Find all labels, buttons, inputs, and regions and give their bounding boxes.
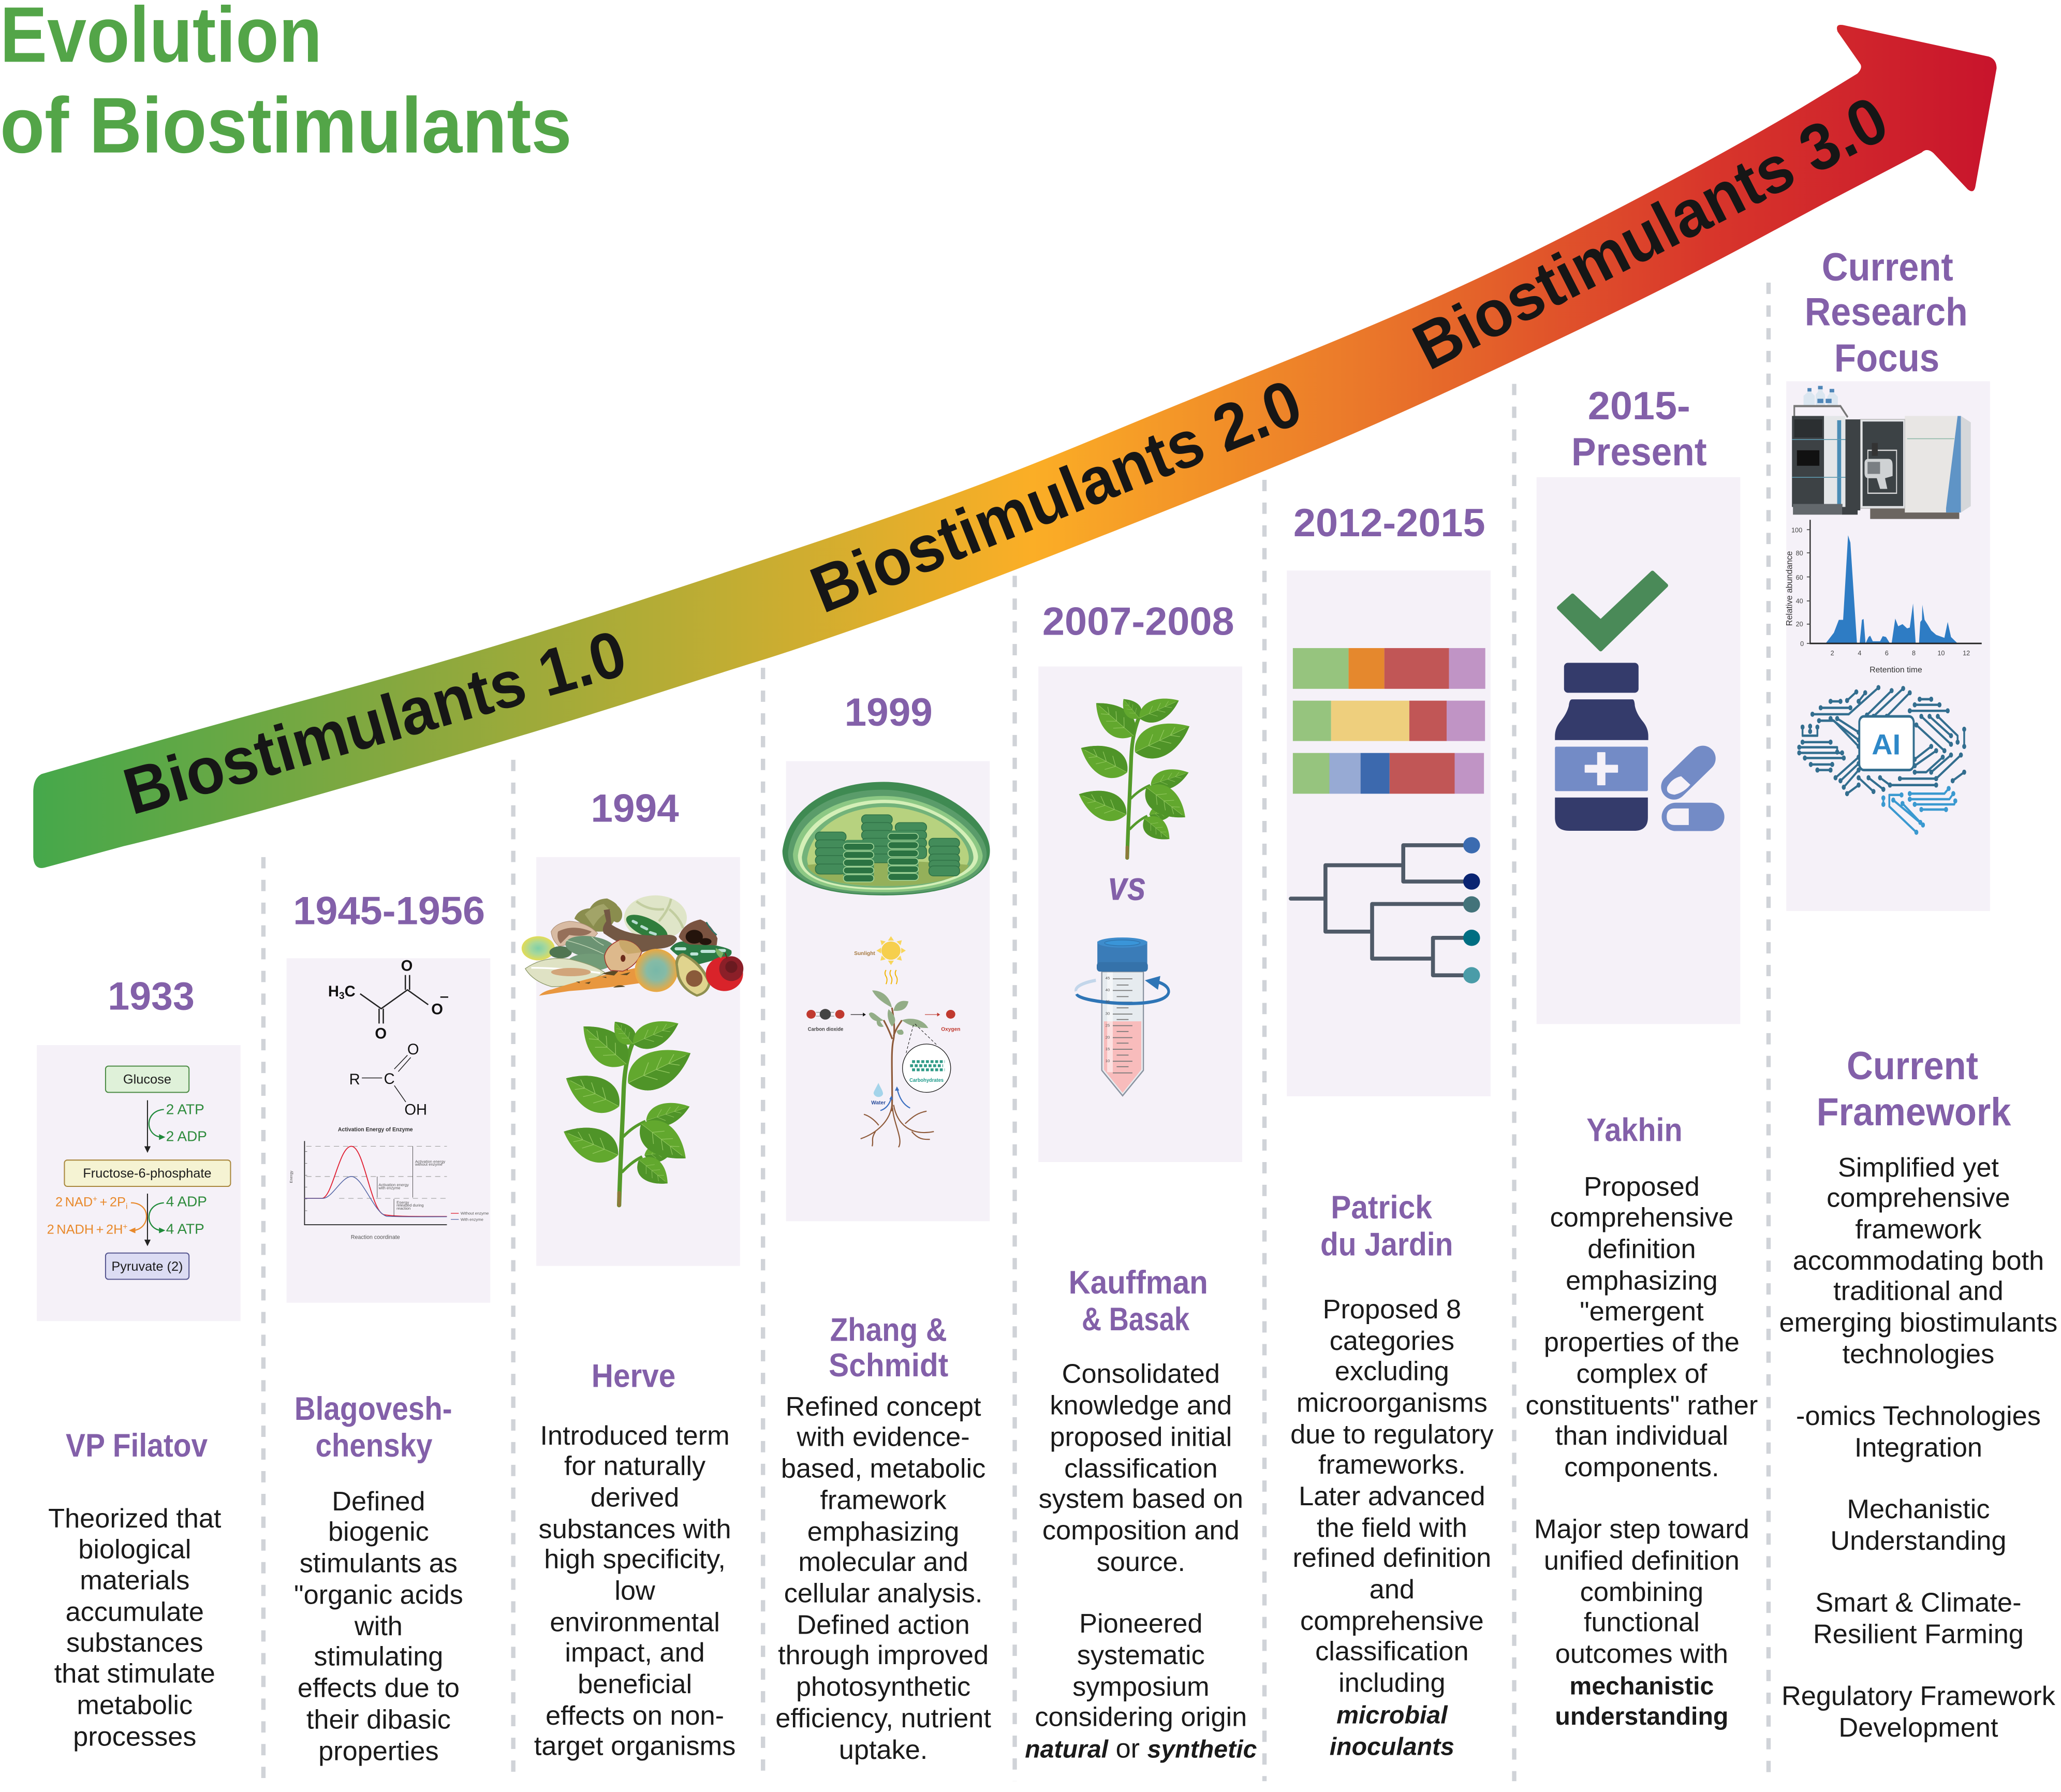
activation energy chart: without enzyme xyxy=(415,1162,443,1167)
year heading: 1945-1956 xyxy=(293,889,485,933)
description: Integration xyxy=(1854,1433,1982,1463)
description: their dibasic xyxy=(306,1705,451,1735)
description: Defined action xyxy=(797,1610,970,1640)
description: outcomes with xyxy=(1555,1639,1728,1669)
pathway arrows xyxy=(129,1100,165,1246)
tube scale numbers: 15 xyxy=(1106,1047,1110,1051)
panel: chloroplast and photosynthesis xyxy=(783,761,990,1221)
description: through improved xyxy=(778,1640,989,1670)
energy labels: + 2P xyxy=(97,1195,126,1209)
description: microbial xyxy=(1336,1701,1448,1729)
description: "organic acids xyxy=(294,1580,463,1610)
panel: composition bars and tree xyxy=(1287,570,1491,1096)
description: Introduced term xyxy=(540,1421,730,1451)
description: low xyxy=(614,1576,655,1606)
column: 1945-1956 xyxy=(287,889,490,1766)
description: source. xyxy=(1097,1547,1185,1577)
chromatogram: 0 xyxy=(1800,640,1804,648)
author name: Schmidt xyxy=(829,1347,948,1384)
description: refined definition xyxy=(1292,1543,1491,1573)
description: due to regulatory xyxy=(1290,1419,1494,1449)
author name: chensky xyxy=(315,1428,433,1464)
activation energy chart: Activation Energy of Enzyme xyxy=(338,1126,413,1133)
activation energy chart xyxy=(289,1126,489,1241)
description: beneficial xyxy=(578,1669,692,1699)
author name: Blagovesh- xyxy=(295,1391,452,1427)
author name: Patrick xyxy=(1331,1189,1432,1226)
description: cellular analysis. xyxy=(784,1579,982,1609)
title xyxy=(0,0,572,170)
carboxyl group: O xyxy=(407,1041,419,1058)
description: framework xyxy=(820,1485,947,1515)
author name xyxy=(829,1312,948,1384)
description: molecular and xyxy=(798,1547,968,1577)
Pyruvate box xyxy=(106,1253,189,1280)
tube scale numbers: 35 xyxy=(1106,1000,1110,1004)
chromatogram: 40 xyxy=(1796,598,1803,605)
tube scale numbers: 45 xyxy=(1106,976,1110,980)
description: comprehensive xyxy=(1550,1202,1733,1232)
description: high specificity, xyxy=(544,1545,726,1575)
panel: plant versus centrifuge tube xyxy=(1038,667,1242,1162)
chromatogram: 4 xyxy=(1858,650,1861,657)
description: uptake. xyxy=(839,1735,928,1765)
pyruvate molecule: H xyxy=(328,983,339,1000)
description: components. xyxy=(1564,1452,1719,1482)
arrow label: Biostimulants 2.0: Biostimulants 2.0 xyxy=(801,365,1312,627)
tube scale numbers: 30 xyxy=(1106,1011,1110,1016)
pyruvate molecule: O xyxy=(431,1001,443,1018)
photosynthesis labels: Sunlight xyxy=(854,951,875,957)
year heading: 1933 xyxy=(108,974,195,1018)
panel: approved medicine xyxy=(1537,477,1740,1024)
description: proposed initial xyxy=(1050,1422,1232,1452)
description: Defined xyxy=(332,1487,425,1517)
activation energy chart: reaction xyxy=(396,1206,410,1211)
energy labels: 2 ATP xyxy=(166,1101,204,1117)
vs label: vs xyxy=(1108,863,1146,908)
description: accommodating both xyxy=(1793,1246,2044,1276)
description: traditional and xyxy=(1833,1276,2004,1306)
description: including xyxy=(1338,1668,1446,1698)
icon: centrifuge tube xyxy=(1076,937,1169,1096)
description: classification xyxy=(1315,1636,1469,1666)
activation energy chart: Activation energy xyxy=(415,1159,445,1164)
icon: LC-MS instrument xyxy=(1792,386,1971,519)
energy labels: 4 ATP xyxy=(166,1221,204,1237)
photosynthesis labels: Oxygen xyxy=(941,1027,960,1033)
description: system based on xyxy=(1039,1484,1243,1514)
description: than individual xyxy=(1555,1421,1728,1451)
description: derived xyxy=(591,1482,679,1512)
description: technologies xyxy=(1843,1340,1994,1370)
author name xyxy=(295,1391,452,1464)
description: Theorized that xyxy=(48,1504,222,1534)
Glucose label: Glucose xyxy=(123,1072,171,1086)
description: environmental xyxy=(550,1608,720,1638)
chromatogram xyxy=(1785,520,1982,674)
carboxyl group xyxy=(349,1041,427,1119)
activation energy chart: with enzyme xyxy=(378,1185,401,1190)
arrow label: Biostimulants 1.0: Biostimulants 1.0 xyxy=(115,616,634,829)
icon: AI circuit brain: AI xyxy=(1872,728,1901,761)
activation energy chart: With enzyme xyxy=(461,1217,483,1222)
activation energy chart: Energy xyxy=(396,1200,409,1205)
author name xyxy=(1069,1265,1208,1338)
description: Later advanced xyxy=(1299,1481,1485,1511)
heading: Research xyxy=(1805,290,1968,334)
description: Simplified yet xyxy=(1838,1153,1999,1183)
pyruvate molecule xyxy=(328,958,448,1042)
description: photosynthetic xyxy=(796,1672,970,1702)
description: Proposed xyxy=(1584,1172,1700,1202)
description: comprehensive xyxy=(1300,1606,1484,1636)
description: stimulants as xyxy=(300,1548,458,1578)
description: combining xyxy=(1580,1577,1703,1607)
chromatogram: 100 xyxy=(1791,527,1802,534)
description: emphasizing xyxy=(1566,1266,1718,1296)
description: constituents" rather xyxy=(1525,1391,1758,1421)
tube scale numbers: 10 xyxy=(1106,1059,1110,1063)
photosynthesis labels: Carbon dioxide xyxy=(808,1027,844,1033)
column: Current Research Focus xyxy=(1785,245,1990,911)
description: -omics Technologies xyxy=(1796,1401,2041,1431)
description: Mechanistic xyxy=(1847,1494,1990,1524)
description: Smart & Climate- xyxy=(1815,1588,2022,1618)
carboxyl group: OH xyxy=(404,1102,427,1119)
tube scale numbers: 20 xyxy=(1106,1035,1110,1039)
description: complex of xyxy=(1576,1359,1707,1389)
description: frameworks. xyxy=(1318,1450,1466,1480)
chromatogram: 10 xyxy=(1937,650,1945,657)
tube scale numbers xyxy=(1106,976,1110,1063)
year heading: 1999 xyxy=(845,691,933,735)
year heading: Present xyxy=(1571,430,1707,474)
author name: du Jardin xyxy=(1320,1226,1453,1262)
description: for naturally xyxy=(564,1451,706,1481)
description: Pioneered xyxy=(1079,1609,1203,1639)
description: substances with xyxy=(539,1514,731,1544)
title: of Biostimulants xyxy=(0,82,572,170)
description: comprehensive xyxy=(1827,1183,2010,1213)
pyruvate molecule: 3 xyxy=(339,991,345,1002)
description: definition xyxy=(1587,1234,1696,1264)
carboxyl group: C xyxy=(384,1071,395,1088)
description: accumulate xyxy=(66,1597,204,1627)
column: Current Framework xyxy=(1779,1044,2057,1743)
description: properties of the xyxy=(1544,1328,1740,1358)
description: with xyxy=(354,1611,403,1641)
activation energy chart: Reaction coordinate xyxy=(351,1235,400,1241)
description: Understanding xyxy=(1830,1526,2007,1556)
description: understanding xyxy=(1555,1702,1728,1730)
chromatogram: 80 xyxy=(1796,550,1803,557)
description: processes xyxy=(73,1722,196,1752)
energy labels: i xyxy=(126,1202,127,1211)
year heading: 2007-2008 xyxy=(1042,600,1234,644)
icon: chloroplast xyxy=(783,782,990,895)
activation energy chart: released during xyxy=(396,1203,424,1208)
description: impact, and xyxy=(565,1638,705,1668)
chromatogram: Retention time xyxy=(1869,666,1922,674)
description: composition and xyxy=(1042,1516,1240,1546)
description: effects on non- xyxy=(546,1701,724,1731)
author name: Yakhin xyxy=(1586,1112,1683,1148)
icon: photosynthesis plant diagram xyxy=(806,936,955,1147)
stacked bar chart xyxy=(1293,648,1485,794)
description: Development xyxy=(1838,1713,1998,1743)
description: Refined concept xyxy=(786,1392,981,1422)
description: materials xyxy=(80,1565,189,1595)
description: Major step toward xyxy=(1534,1514,1749,1544)
description: the field with xyxy=(1317,1513,1467,1543)
description: microorganisms xyxy=(1297,1388,1488,1418)
description: Consolidated xyxy=(1062,1359,1220,1389)
icon: capsules xyxy=(1661,758,1725,831)
heading: Current xyxy=(1847,1044,1978,1088)
energy labels: 2 ADP xyxy=(166,1128,207,1144)
description: "emergent xyxy=(1580,1297,1704,1327)
description: inoculants xyxy=(1330,1732,1454,1760)
description: knowledge and xyxy=(1050,1391,1232,1421)
description: classification xyxy=(1064,1453,1218,1483)
panel: research tools xyxy=(1785,381,1990,911)
description: based, metabolic xyxy=(781,1453,985,1483)
description: symposium xyxy=(1072,1672,1210,1702)
description: efficiency, nutrient xyxy=(775,1703,991,1734)
Fructose label: Fructose-6-phosphate xyxy=(83,1166,212,1181)
photosynthesis labels xyxy=(808,951,960,1106)
chromatogram: 12 xyxy=(1963,650,1970,657)
carboxyl group: R xyxy=(349,1071,360,1088)
energy labels: + xyxy=(123,1223,127,1231)
description: that stimulate xyxy=(54,1659,215,1689)
pyruvate molecule: O xyxy=(375,1025,387,1042)
author name: VP Filatov xyxy=(66,1428,208,1464)
Fructose box xyxy=(64,1160,230,1186)
description: emerging biostimulants xyxy=(1779,1308,2057,1338)
description: effects due to xyxy=(298,1673,460,1703)
description: Regulatory Framework xyxy=(1782,1681,2056,1711)
heading: Focus xyxy=(1834,336,1939,380)
photosynthesis labels: Water xyxy=(871,1100,886,1106)
column: 2012-2015 xyxy=(1287,501,1494,1760)
description: substances xyxy=(66,1628,203,1658)
description: and xyxy=(1370,1575,1415,1605)
Pyruvate label: Pyruvate (2) xyxy=(111,1259,183,1274)
chromatogram: 60 xyxy=(1796,574,1803,581)
panel: organic waste and plant xyxy=(522,857,743,1266)
heading xyxy=(1805,245,1968,380)
Glucose box xyxy=(106,1066,189,1092)
description: functional xyxy=(1584,1608,1700,1638)
photosynthesis labels: Carbohydrates xyxy=(909,1078,944,1083)
year heading xyxy=(1571,384,1707,474)
panel: glycolysis diagram xyxy=(37,1045,241,1321)
description: mechanistic xyxy=(1569,1672,1714,1700)
energy labels: 2 NADH + 2H xyxy=(47,1223,123,1237)
description: with evidence- xyxy=(796,1422,970,1452)
year heading: 2012-2015 xyxy=(1293,501,1485,545)
activation energy chart: Activation energy xyxy=(378,1183,409,1187)
column: 1933 xyxy=(37,974,241,1752)
icon: check mark xyxy=(1559,572,1666,650)
author name: & Basak xyxy=(1082,1301,1190,1338)
description: Proposed 8 xyxy=(1323,1295,1461,1325)
description: considering origin xyxy=(1035,1702,1247,1732)
chromatogram: Relative abundance xyxy=(1785,551,1794,626)
year heading: 2015- xyxy=(1588,384,1690,428)
description: properties xyxy=(318,1736,439,1766)
description: biogenic xyxy=(328,1517,429,1547)
pyruvate molecule: C xyxy=(345,983,356,1000)
author name xyxy=(1320,1189,1453,1262)
description: Resilient Farming xyxy=(1813,1619,2024,1649)
author name: Zhang & xyxy=(830,1312,947,1348)
heading: Framework xyxy=(1817,1090,2011,1134)
icon: bottle xyxy=(1555,663,1648,831)
dashed column dividers xyxy=(263,283,1769,1781)
column: 2007-2008 xyxy=(1025,600,1257,1764)
tube scale numbers: 25 xyxy=(1106,1023,1110,1027)
icon: plant xyxy=(557,1012,699,1205)
activation energy chart: Without enzyme xyxy=(461,1211,489,1216)
icon: pile of produce xyxy=(522,895,743,997)
chromatogram: 6 xyxy=(1885,650,1889,657)
chromatogram: 8 xyxy=(1912,650,1916,657)
description: target organisms xyxy=(534,1731,735,1761)
panel: molecules and energy chart xyxy=(287,958,490,1303)
activation energy chart: Energy xyxy=(289,1170,293,1183)
year heading: 1994 xyxy=(591,786,679,830)
heading: Current xyxy=(1822,245,1953,289)
energy labels: 2 NAD xyxy=(55,1195,93,1209)
heading xyxy=(1817,1044,2011,1134)
description: unified definition xyxy=(1544,1546,1740,1576)
description: emphasizing xyxy=(807,1517,959,1547)
chromatogram: 20 xyxy=(1796,621,1803,628)
phylogenetic tree xyxy=(1291,837,1480,983)
icon: AI circuit brain xyxy=(1799,687,1964,832)
icon: plant xyxy=(1073,691,1197,858)
energy labels: 4 ADP xyxy=(166,1193,207,1209)
description: framework xyxy=(1855,1214,1982,1244)
description: systematic xyxy=(1077,1640,1205,1670)
column: 1994 xyxy=(522,786,743,1761)
description: stimulating xyxy=(314,1642,443,1672)
tube scale numbers: 40 xyxy=(1106,988,1110,992)
description: categories xyxy=(1330,1326,1454,1356)
arrow label: Biostimulants 3.0: Biostimulants 3.0 xyxy=(1402,82,1899,384)
description: biological xyxy=(78,1535,191,1565)
description: natural or synthetic xyxy=(1025,1734,1257,1764)
description: excluding xyxy=(1335,1357,1449,1387)
chromatogram: 2 xyxy=(1831,650,1834,657)
author name: Kauffman xyxy=(1069,1265,1208,1301)
author name: Herve xyxy=(592,1358,675,1394)
column: 2015-Present xyxy=(1525,384,1758,1730)
energy labels: + xyxy=(93,1195,97,1203)
pyruvate molecule: O xyxy=(401,958,413,974)
energy labels xyxy=(47,1101,207,1237)
arrow: timeline banner xyxy=(33,25,1997,868)
column: 1999 xyxy=(775,691,991,1765)
description: metabolic xyxy=(77,1691,193,1721)
